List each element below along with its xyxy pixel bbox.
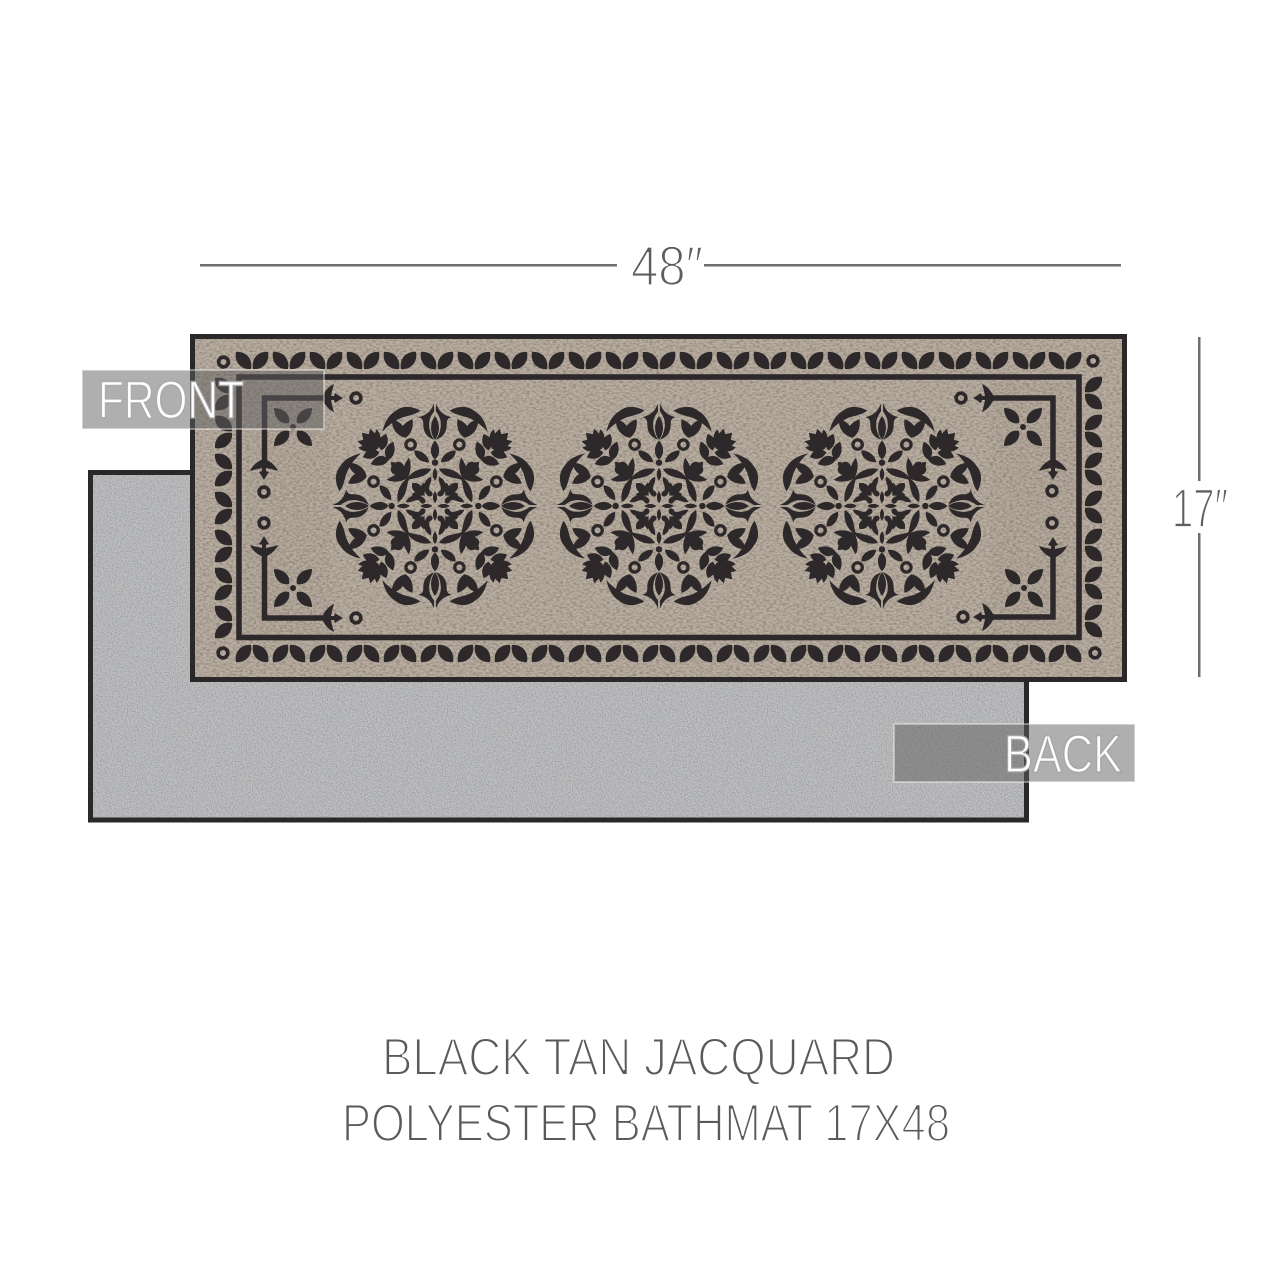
corner bracket: top right — [955, 384, 1067, 497]
corner rings of border — [217, 355, 1101, 659]
corner bracket: bottom right — [957, 517, 1067, 631]
front side of bathmat — [192, 336, 1124, 680]
leaf border: bottom row — [236, 645, 1081, 662]
leaf border: left column — [215, 378, 232, 638]
title: product name — [342, 1028, 950, 1153]
medallion: left — [333, 404, 537, 608]
medallion: right — [780, 404, 984, 608]
title: product name: POLYESTER BATHMAT 17X48 — [342, 1094, 950, 1153]
dimension: height 17 inches: 17″ — [1172, 477, 1228, 539]
label: FRONT: FRONT — [98, 371, 244, 430]
label: BACK: BACK — [1004, 725, 1122, 784]
corner bracket: bottom left — [250, 517, 362, 632]
inner rectangular frame — [239, 377, 1079, 638]
medallion: centre — [557, 404, 761, 608]
label: BACK — [894, 724, 1135, 784]
back side of bathmat — [90, 472, 1026, 820]
title: product name: BLACK TAN JACQUARD — [382, 1028, 895, 1087]
dimension: width 48 inches: 48″ — [631, 234, 703, 297]
leaf border: top row — [236, 352, 1081, 369]
corner bracket: top left — [250, 384, 362, 498]
leaf border: right column — [1085, 377, 1102, 637]
